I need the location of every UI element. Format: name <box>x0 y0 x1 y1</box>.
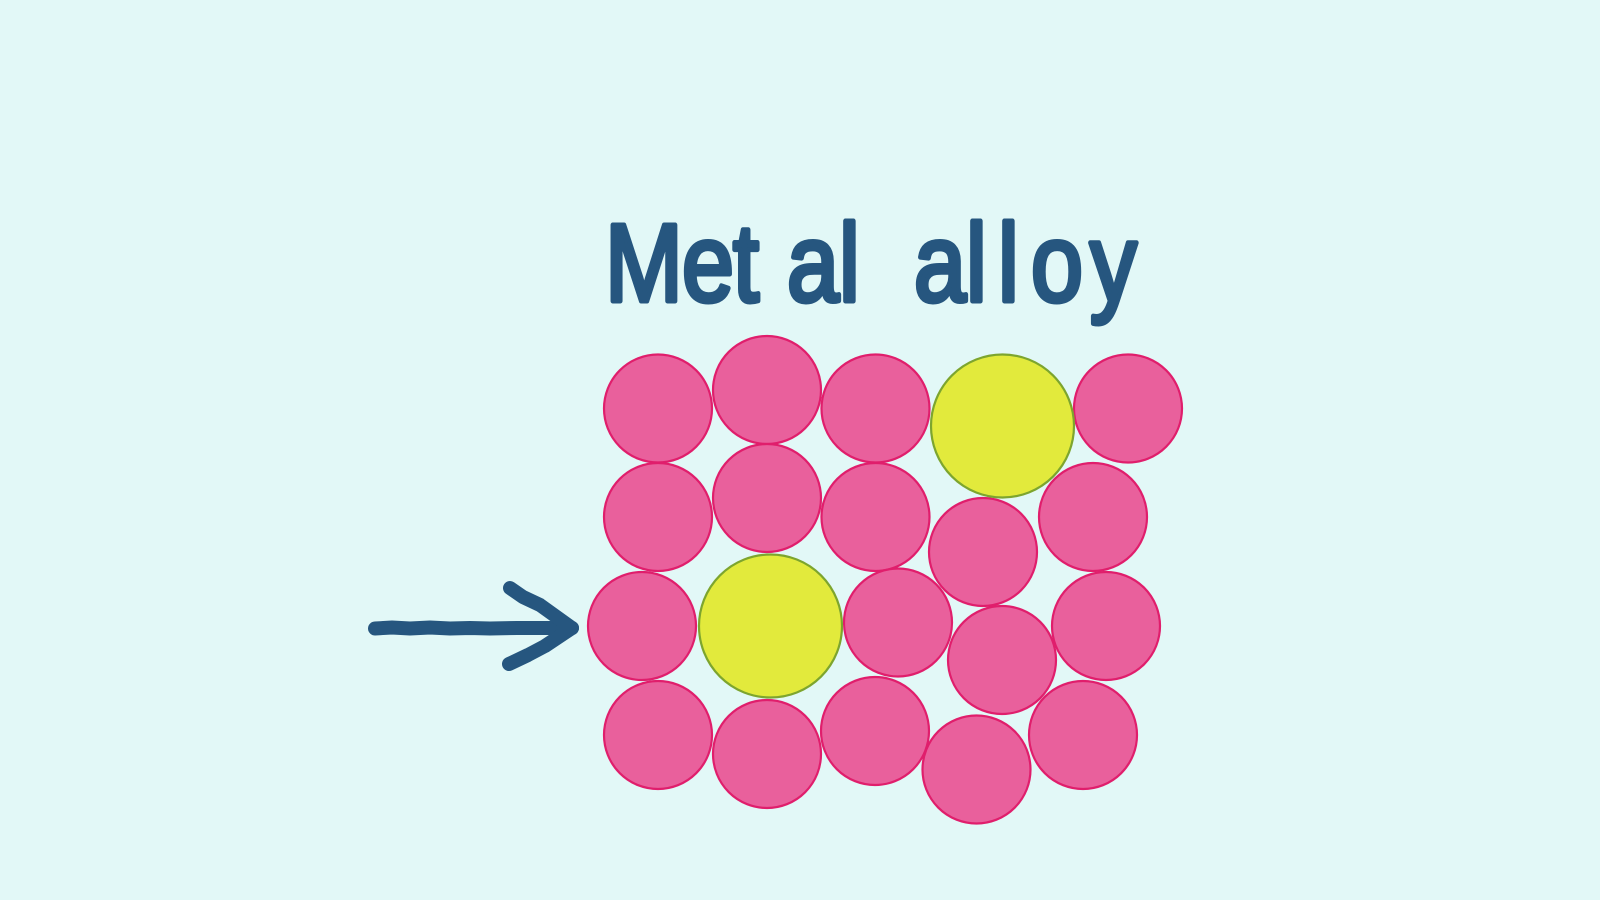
base metal atoms: third row <box>588 568 1160 714</box>
base metal atoms: top row <box>604 336 1182 462</box>
base metal atoms: second row <box>604 444 1147 606</box>
larger alloying atom, lower left <box>699 554 842 698</box>
title: Metal alloy <box>605 202 1137 325</box>
alloy lattice of atoms <box>588 336 1182 824</box>
base metal atoms: bottom row <box>604 677 1137 824</box>
arrow pointing at the alloy lattice <box>375 588 572 664</box>
larger alloying atom, top right <box>931 354 1074 498</box>
